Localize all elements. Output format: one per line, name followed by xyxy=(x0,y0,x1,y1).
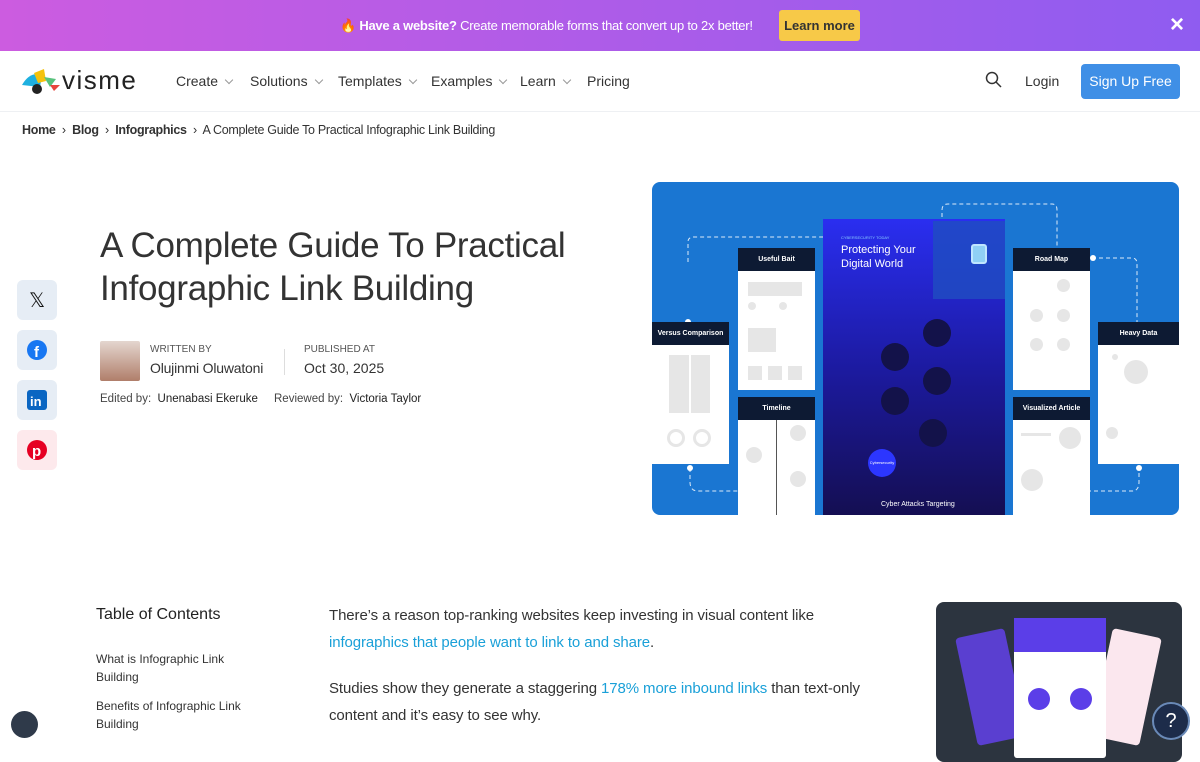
icon: pinterest xyxy=(17,430,57,470)
icon: linkedin: in xyxy=(30,394,42,409)
text: Templates xyxy=(338,73,402,89)
text: Examples xyxy=(431,73,492,89)
center infographic: protecting your digital world: CYBERSECURITY TODAY xyxy=(841,235,889,240)
text: Learn xyxy=(520,73,556,89)
sign up button xyxy=(1081,64,1180,99)
article body text: There’s a reason top-ranking websites keep investing in visual content like xyxy=(329,607,814,624)
icon: facebook xyxy=(17,330,57,370)
card: heavy data: Heavy Data xyxy=(1120,330,1157,337)
card: useful bait xyxy=(738,248,815,390)
author block: Oct 30, 2025 xyxy=(304,360,384,376)
promo banner xyxy=(0,0,1200,51)
help button xyxy=(1152,702,1190,740)
table of contents: Benefits of Infographic Link Building xyxy=(96,699,241,731)
card: visualized article xyxy=(1013,397,1090,527)
social share buttons xyxy=(17,280,57,470)
menu items xyxy=(176,73,1059,89)
avatar xyxy=(100,341,140,381)
icon: X: 𝕏 xyxy=(29,290,45,312)
center infographic: protecting your digital world: Cyber Attacks Targeting xyxy=(881,501,955,508)
card: useful bait: Useful Bait xyxy=(758,256,795,263)
author block xyxy=(100,341,421,405)
card: visualized article: Visualized Article xyxy=(1023,405,1080,412)
card: versus comparison xyxy=(652,322,729,464)
center infographic: protecting your digital world: Cybersecurity xyxy=(870,460,894,465)
author block: Edited by: Unenabasi Ekeruke xyxy=(100,393,258,405)
text: Solutions xyxy=(250,73,308,89)
icon: pinterest: p xyxy=(32,443,41,460)
article title: A Complete Guide To Practical Infographic Link Building xyxy=(100,226,565,308)
author block: Reviewed by: Victoria Taylor xyxy=(274,393,421,405)
text: Login xyxy=(1025,73,1059,89)
banner text: 🔥 Have a website? Create memorable forms that convert up to 2x better! xyxy=(340,18,753,33)
article body text: content and it’s easy to see why. xyxy=(329,707,541,724)
card: heavy data xyxy=(1098,322,1179,464)
center infographic: protecting your digital world xyxy=(823,219,1005,519)
help button: ? xyxy=(1165,710,1177,732)
author block: WRITTEN BY xyxy=(150,344,212,355)
promo card: social media infographic xyxy=(936,602,1182,762)
card: road map xyxy=(1013,248,1090,390)
table of contents: What is Infographic Link Building xyxy=(96,652,224,684)
icon: X xyxy=(17,280,57,320)
card: road map: Road Map xyxy=(1035,256,1068,263)
center infographic: protecting your digital world: Protecting Your xyxy=(841,244,916,256)
logo: visme xyxy=(62,65,137,95)
author block: PUBLISHED AT xyxy=(304,344,375,355)
card: timeline xyxy=(738,397,815,527)
card: versus comparison: Versus Comparison xyxy=(658,330,723,337)
table of contents: Table of Contents xyxy=(96,606,221,623)
learn more button: Learn more xyxy=(784,18,855,33)
text: Create xyxy=(176,73,218,89)
cookie icon xyxy=(11,711,38,738)
table of contents xyxy=(96,606,241,731)
close icon: × xyxy=(1170,11,1184,38)
article body text: Studies show they generate a staggering 178% more inbound links than text-only xyxy=(329,680,860,697)
breadcrumb: Home › Blog › Infographics › A Complete Guide To Practical Infographic Link Building xyxy=(22,123,495,137)
search icon xyxy=(986,72,1002,88)
text: Pricing xyxy=(587,73,630,89)
learn more button xyxy=(779,10,860,41)
sign up button: Sign Up Free xyxy=(1089,73,1172,89)
hero image xyxy=(652,182,1179,515)
center infographic: protecting your digital world: Digital World xyxy=(841,258,903,270)
article body text: infographics that people want to link to and share. xyxy=(329,634,654,651)
logo xyxy=(22,65,137,95)
navigation bar xyxy=(0,52,1200,112)
article body text xyxy=(329,607,860,724)
icon: linkedin xyxy=(17,380,57,420)
card: timeline: Timeline xyxy=(762,405,791,412)
author block: Olujinmi Oluwatoni xyxy=(150,360,263,376)
